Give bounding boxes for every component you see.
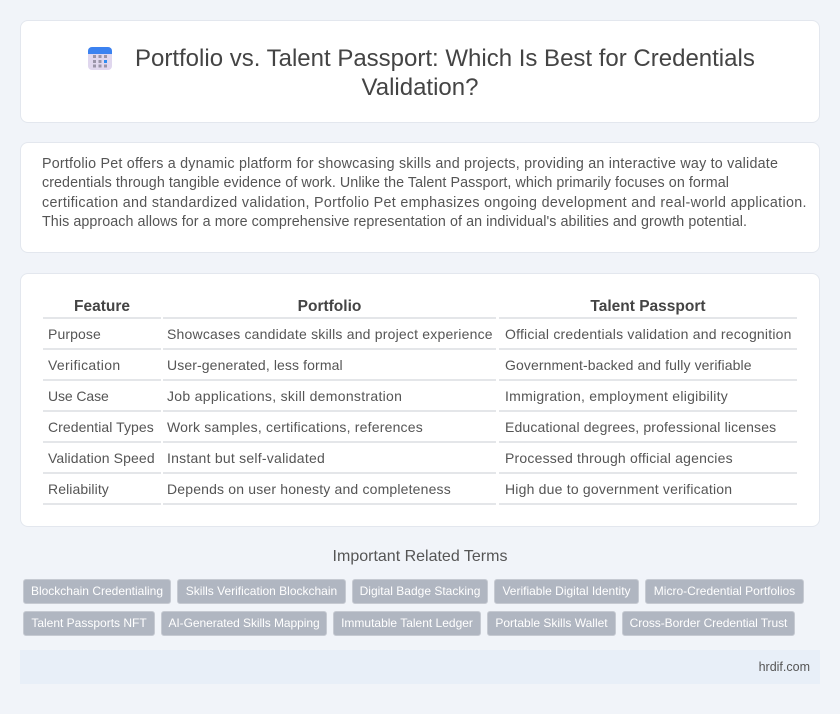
tag: Portable Skills Wallet xyxy=(495,616,608,630)
icon: calendar xyxy=(88,47,112,70)
tag: Digital Badge Stacking xyxy=(360,584,480,598)
tag xyxy=(161,611,327,636)
comparison table: Work samples, certifications, references xyxy=(167,419,423,435)
comparison table: User-generated, less formal xyxy=(167,357,343,373)
tag: Talent Passports NFT xyxy=(31,616,147,630)
comparison table: Government-backed and fully verifiable xyxy=(505,357,752,373)
comparison table: Job applications, skill demonstration xyxy=(167,388,402,404)
comparison table: High due to government verification xyxy=(505,481,732,497)
tag xyxy=(23,611,155,636)
tag: Immutable Talent Ledger xyxy=(341,616,473,630)
tag xyxy=(645,579,804,604)
row: Purpose: Purpose xyxy=(48,326,101,342)
heading: Important Related Terms: Important Related Terms xyxy=(333,548,507,565)
tag xyxy=(352,579,488,604)
footer bar xyxy=(20,650,820,684)
intro paragraph xyxy=(42,156,807,230)
footer source: hrdif.com xyxy=(759,660,810,674)
header: Portfolio: Portfolio xyxy=(298,298,361,315)
tag xyxy=(487,611,616,636)
header: Feature: Feature xyxy=(74,298,130,315)
row: Credential Types: Credential Types xyxy=(48,419,154,435)
title xyxy=(135,45,755,101)
panel: comparison table card xyxy=(20,273,820,527)
title: Portfolio vs. Talent Passport: Which Is Best for Credentials xyxy=(135,45,755,72)
tag: Skills Verification Blockchain xyxy=(186,584,337,598)
comparison table: Official credentials validation and recognition xyxy=(505,326,792,342)
comparison table: Depends on user honesty and completeness xyxy=(167,481,451,497)
intro paragraph: certification and standardized validation, Portfolio Pet emphasizes ongoing development and real-world application. xyxy=(42,194,807,210)
tag: AI-Generated Skills Mapping xyxy=(168,616,320,630)
comparison table: Processed through official agencies xyxy=(505,450,733,466)
row: Validation Speed: Validation Speed xyxy=(48,450,155,466)
comparison table: Showcases candidate skills and project experience xyxy=(167,326,493,342)
comparison table: Immigration, employment eligibility xyxy=(505,388,728,404)
tag xyxy=(333,611,481,636)
comparison table: Educational degrees, professional licenses xyxy=(505,419,776,435)
tag xyxy=(177,579,346,604)
row: Verification: Verification xyxy=(48,357,120,373)
panel: intro text card xyxy=(20,142,820,253)
panel: title card xyxy=(20,20,820,123)
header: Talent Passport: Talent Passport xyxy=(590,298,706,315)
tag xyxy=(23,579,171,604)
intro paragraph: Portfolio Pet offers a dynamic platform for showcasing skills and projects, providing an interactive way to validate xyxy=(42,156,778,172)
tag: Verifiable Digital Identity xyxy=(502,584,631,598)
row: Use Case: Use Case xyxy=(48,388,109,404)
tag: Cross-Border Credential Trust xyxy=(630,616,787,630)
tag xyxy=(494,579,639,604)
row: Reliability: Reliability xyxy=(48,481,109,497)
intro paragraph: This approach allows for a more comprehensive representation of an individual's abilities and growth potential. xyxy=(42,214,747,230)
intro paragraph: credentials through tangible evidence of work. Unlike the Talent Passport, which primarily focuses on formal xyxy=(42,175,729,191)
tag xyxy=(622,611,795,636)
title: Validation? xyxy=(362,74,478,101)
comparison table: Instant but self-validated xyxy=(167,450,325,466)
tag: Micro-Credential Portfolios xyxy=(654,584,795,598)
tag: Blockchain Credentialing xyxy=(31,584,163,598)
